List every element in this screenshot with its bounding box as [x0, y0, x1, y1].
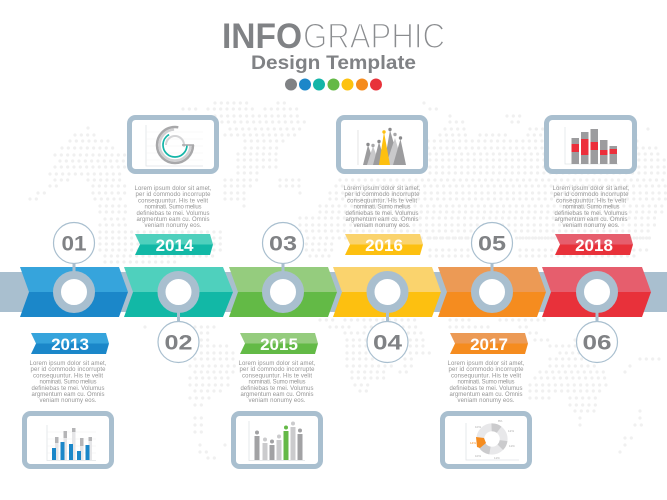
text block 2017: nominati. Sumo melius [458, 380, 514, 386]
text block 2013: Lorem ipsum dolor sit amet, [30, 361, 107, 367]
text block 2017 [448, 361, 525, 404]
marker 06: 06 [582, 332, 612, 354]
text block 2018 [552, 186, 630, 229]
text block 2013: veniam nonumy eos. [40, 398, 97, 404]
ribbon 2014 [135, 234, 213, 255]
text block 2018: nominati. Sumo melius [562, 205, 620, 211]
card: blue bars chart [24, 414, 112, 466]
text block 2015: Lorem ipsum dolor sit amet, [238, 361, 316, 367]
text block 2016: consequuntur. His te velit [347, 198, 417, 204]
text block 2013 [30, 361, 107, 404]
ribbon 2013 [31, 333, 109, 354]
text block 2016 [344, 186, 421, 229]
text block 2014: consequuntur. His te velit [138, 198, 208, 204]
text block 2018: definiebas te mei. Volumus [554, 211, 628, 217]
ribbon 2015: 2015 [260, 335, 298, 354]
marker 05: 05 [478, 232, 506, 256]
text block 2015: consequuntur. His te velit [242, 373, 312, 379]
marker 02 [158, 275, 199, 362]
dotted world map background [30, 103, 666, 458]
text block 2015: veniam nonumy eos. [248, 398, 306, 404]
text block 2015: nominati. Sumo melius [248, 380, 306, 386]
ribbon 2013: 2013 [51, 335, 89, 354]
text block 2016: argmentum eam cu. Omnis [346, 217, 418, 223]
title: INFO [222, 17, 302, 56]
text block 2016: Lorem ipsum dolor sit amet, [344, 186, 421, 192]
text block 2017: per id commodo incorrupte [448, 367, 524, 373]
marker 04: 04 [373, 332, 402, 354]
card: green bars chart [234, 414, 320, 466]
subtitle: Design Template [251, 53, 416, 74]
marker 01: 01 [62, 232, 87, 256]
text block 2013: argmentum eam cu. Omnis [32, 392, 104, 398]
text block 2014 [134, 186, 212, 229]
text block 2013: nominati. Sumo melius [40, 380, 96, 386]
arrow 5 orange [438, 267, 546, 317]
text block 2017: veniam nonumy eos. [458, 398, 515, 404]
ribbon 2018 [555, 234, 633, 255]
card: donut chart: 14% [470, 441, 476, 445]
ribbon 2017 [450, 333, 528, 354]
card: stacked bars chart [546, 118, 634, 172]
marker 03 [262, 222, 304, 309]
marker 04 [367, 275, 408, 362]
ribbon 2018: 2018 [575, 236, 613, 255]
title [222, 17, 445, 56]
ribbon 2015 [240, 333, 318, 354]
card: mountain chart [338, 118, 426, 172]
text block 2016: per id commodo incorrupte [344, 192, 420, 198]
ribbon 2016: 2016 [365, 236, 403, 255]
card: donut chart: 11% [494, 456, 500, 460]
marker 03: 03 [269, 232, 297, 256]
text block 2018: argmentum eam cu. Omnis [554, 217, 628, 223]
text block 2018: Lorem ipsum dolor sit amet, [552, 186, 630, 192]
text block 2015: definiebas te mei. Volumus [240, 386, 314, 392]
text block 2018: veniam nonumy eos. [562, 223, 620, 229]
text block 2015 [238, 361, 316, 404]
arrow 4 yellow [333, 267, 441, 317]
text block 2013: consequuntur. His te velit [33, 373, 103, 379]
text block 2016: nominati. Sumo melius [354, 205, 410, 211]
text block 2014: veniam nonumy eos. [144, 223, 202, 229]
ribbon 2014: 2014 [156, 236, 194, 255]
card: donut chart: 10% [475, 454, 481, 458]
arrow 1 blue [20, 267, 128, 317]
text block 2015: argmentum eam cu. Omnis [240, 392, 314, 398]
text block 2015: per id commodo incorrupte [240, 367, 315, 373]
text block 2018: consequuntur. His te velit [556, 198, 626, 204]
card: donut chart: 8% [498, 419, 503, 423]
marker 05 [472, 222, 512, 309]
text block 2017: argmentum eam cu. Omnis [450, 392, 522, 398]
text block 2013: definiebas te mei. Volumus [32, 386, 104, 392]
card: donut chart: 12% [508, 429, 514, 433]
text block 2014: nominati. Sumo melius [144, 205, 202, 211]
card: radial chart [130, 118, 216, 172]
ribbon 2017: 2017 [470, 335, 508, 354]
text block 2016: veniam nonumy eos. [354, 223, 411, 229]
timeline band [0, 272, 667, 312]
colour dots row [285, 78, 382, 90]
text block 2017: Lorem ipsum dolor sit amet, [448, 361, 525, 367]
card: donut chart: 10% [475, 425, 481, 429]
text block 2014: definiebas te mei. Volumus [136, 211, 210, 217]
marker 01 [54, 222, 94, 309]
ribbon 2016 [345, 234, 423, 255]
text block 2018: per id commodo incorrupte [554, 192, 629, 198]
text block 2017: consequuntur. His te velit [451, 373, 521, 379]
text block 2016: definiebas te mei. Volumus [346, 211, 418, 217]
marker 06 [576, 275, 618, 362]
marker 02: 02 [164, 332, 192, 354]
text block 2013: per id commodo incorrupte [30, 367, 106, 373]
arrow 2 teal [124, 267, 233, 317]
text block 2014: per id commodo incorrupte [136, 192, 211, 198]
arrow 3 green [229, 267, 337, 317]
card: donut chart: 11% [509, 444, 515, 448]
title: GRAPHIC [303, 17, 445, 56]
text block 2017: definiebas te mei. Volumus [450, 386, 522, 392]
text block 2014: argmentum eam cu. Omnis [136, 217, 210, 223]
card: donut chart [442, 414, 530, 466]
arrow 6 red [542, 267, 651, 317]
text block 2014: Lorem ipsum dolor sit amet, [134, 186, 212, 192]
